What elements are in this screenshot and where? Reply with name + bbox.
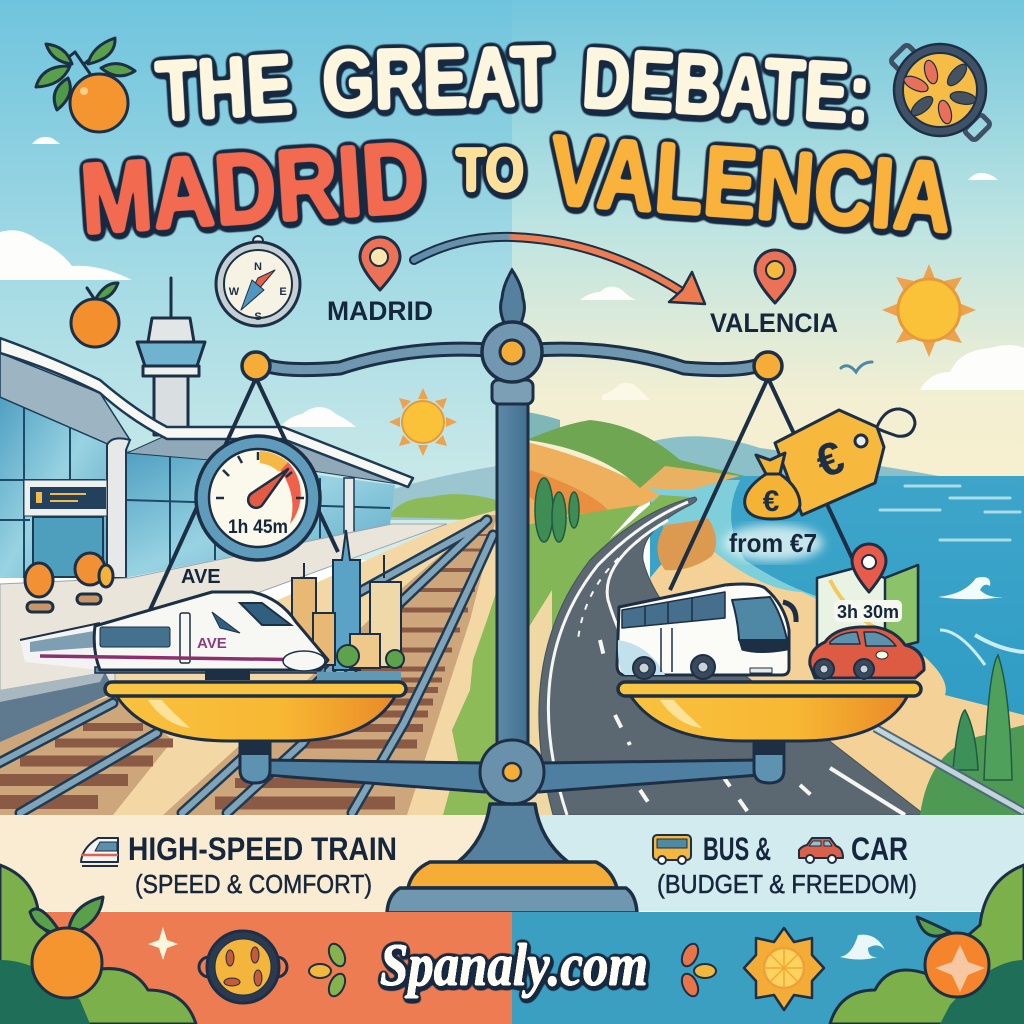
right pan: [618, 682, 921, 741]
icon: compass: [216, 236, 300, 326]
pillars: [107, 438, 130, 578]
icon: sun slice: [744, 928, 824, 1010]
title: MADRID: [77, 121, 428, 256]
left pan: [105, 682, 406, 741]
green hill: [527, 420, 745, 488]
icon: orange: [71, 283, 119, 347]
icon: orange bottom left: [30, 897, 103, 998]
wave: [938, 577, 1010, 599]
icon: money bag: [745, 453, 800, 519]
icon: Valencia pin: [755, 250, 795, 303]
footer band: [0, 912, 1024, 1024]
icon: price tag: [775, 409, 915, 515]
sea highlights: [880, 486, 1020, 540]
subheading: budget and freedom: (BUDGET & FREEDOM): [657, 869, 917, 899]
icon: price tag: €: [809, 430, 851, 488]
brand: Spanaly.com: Spanaly.com: [380, 932, 648, 998]
shallow water: [640, 480, 830, 600]
arrow: Madrid to Valencia: [414, 237, 705, 304]
icon: car: [799, 838, 843, 863]
column: [497, 385, 528, 785]
label: AVE: AVE: [181, 566, 221, 588]
door: [180, 613, 190, 663]
icon: sun right: [882, 264, 976, 357]
guard rail: [875, 728, 1024, 812]
departure sign: [24, 480, 107, 516]
icon: compass: N: [254, 261, 262, 273]
arms: [268, 349, 756, 370]
bus: [617, 584, 796, 679]
lower hub: [480, 740, 544, 804]
label: 3h 30m: 3h 30m: [837, 602, 899, 622]
car: [810, 627, 924, 679]
icon: paella pan (title): [890, 44, 991, 141]
balance scale: [150, 270, 860, 804]
left bush: [0, 865, 196, 1024]
icon: compass: S: [254, 311, 262, 323]
platform: [0, 524, 447, 742]
icon: map pin: [852, 544, 886, 592]
icon: Madrid pin: [360, 237, 400, 290]
icon: footer wave: [840, 935, 885, 960]
entrance door: [33, 517, 103, 577]
strings: [150, 378, 860, 610]
sky background: [0, 0, 1024, 560]
nose: [283, 651, 325, 671]
panel: right caption: [512, 815, 1024, 911]
icon: compass: E: [279, 286, 287, 298]
AVE train: [20, 592, 328, 680]
right scene: hills and coast: [527, 412, 1024, 815]
city skyline: [292, 530, 404, 670]
ballast right track: [163, 515, 497, 815]
sleepers left track: [0, 727, 173, 802]
subheading: speed and comfort: (SPEED & COMFORT): [135, 869, 372, 899]
heading: bus and: BUS &: [703, 831, 771, 867]
heading: car: CAR: [851, 831, 908, 867]
road: [527, 497, 925, 815]
label: Valencia: VALENCIA: [710, 308, 838, 338]
collar: [492, 380, 533, 404]
title: TO: [456, 136, 524, 204]
glass facade: [0, 395, 110, 578]
scale pedestal: [387, 804, 637, 913]
icon: leaves right: [679, 941, 716, 999]
railway tracks: [0, 510, 497, 815]
end balls: [242, 352, 270, 380]
green verge: [443, 590, 497, 815]
finial: [501, 270, 524, 325]
icon: seagull: [841, 362, 872, 372]
title: DEBATE:: [580, 31, 873, 143]
icon: bus: [653, 835, 691, 864]
icon: leaves left: [309, 941, 348, 999]
beach: [640, 550, 1024, 815]
icon: sparkle: [148, 927, 178, 960]
icon: money bag: €: [763, 485, 780, 518]
hub: [482, 322, 542, 382]
left scene: distant hills: [388, 466, 497, 520]
body: [94, 592, 328, 670]
cypress trees on hill: [535, 478, 579, 542]
gauge: 1h 45m: [196, 436, 320, 560]
right bush: [830, 865, 1024, 1024]
clouds: [0, 137, 1024, 427]
icon: orange bottom right: [917, 917, 989, 997]
title: GREAT: [321, 29, 552, 129]
control tower: [137, 278, 205, 435]
coastal trees: [920, 655, 1024, 815]
soffits: [0, 353, 130, 445]
cliff: [658, 518, 716, 570]
heading: high-speed train: HIGH-SPEED TRAIN: [128, 831, 397, 867]
panel: left caption: [0, 815, 512, 911]
cab window: [240, 603, 291, 625]
rails: [0, 520, 493, 813]
icon: road map: [817, 565, 918, 650]
stripe: [40, 656, 320, 660]
title: [77, 29, 955, 256]
label: from €7: from €7: [729, 528, 817, 558]
gauge: 1h 45m: 1h 45m: [228, 517, 288, 538]
under frame: [95, 667, 325, 673]
sleepers right track: [215, 535, 490, 803]
icon: sun left: [389, 388, 457, 456]
terminal building: [0, 338, 413, 578]
tail with speed blur: [20, 623, 100, 670]
pan tray under city: [317, 672, 401, 682]
icon: orange with leaves (title): [36, 38, 135, 132]
icon: paella pan footer: [199, 931, 287, 1003]
potted orange trees: [25, 553, 113, 612]
roof: [0, 338, 413, 487]
ballast left track: [0, 695, 173, 815]
icon: train: [81, 838, 118, 866]
title: THE: [154, 37, 295, 140]
icon: compass: W: [229, 286, 240, 298]
logo: AVE: [197, 635, 227, 652]
lower beam: [265, 760, 759, 792]
orange hillside: [527, 442, 660, 525]
label: Madrid: MADRID: [327, 296, 433, 326]
